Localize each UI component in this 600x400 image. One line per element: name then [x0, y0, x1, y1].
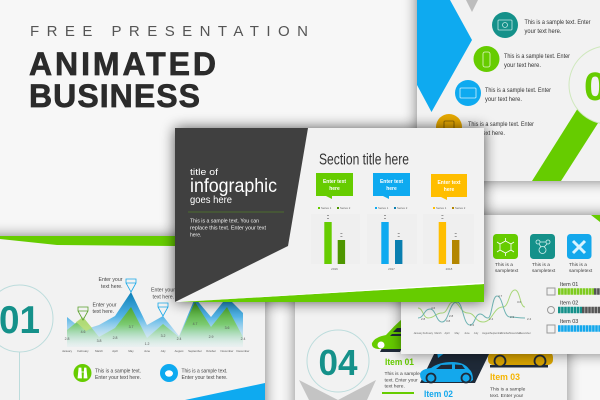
tile captions: sampletext	[569, 268, 593, 274]
tile captions: sampletext	[495, 268, 519, 274]
list item 2: your text here.	[504, 62, 541, 69]
area chart: February	[77, 349, 89, 353]
line chart: 1.2	[470, 323, 475, 327]
number circle	[569, 46, 600, 124]
column: 2018: Series 2	[455, 206, 466, 210]
icon text: green	[74, 364, 141, 382]
icon tile: nodes	[530, 234, 555, 259]
line chart: August	[482, 332, 490, 335]
line chart: March	[435, 332, 442, 335]
icon tile: molecule	[493, 234, 518, 259]
column: 2017: here	[386, 186, 397, 192]
line chart: 2.8	[421, 317, 426, 321]
icon text: green: This is a sample text.	[95, 368, 141, 374]
line chart: October	[501, 332, 510, 335]
column: 2017: Enter text	[380, 179, 403, 185]
dark panel title: title of	[190, 167, 218, 178]
line chart: January	[414, 332, 423, 335]
area chart: 3.8	[97, 339, 101, 343]
icon text: blue: Enter your text here.	[182, 375, 228, 381]
tile captions: sampletext	[532, 268, 556, 274]
column: 2017	[367, 173, 417, 271]
progress: item 02: Item 02	[560, 300, 578, 306]
blue corner	[185, 383, 265, 400]
item 01: text here.	[384, 384, 405, 390]
number circle	[307, 330, 369, 392]
section title: Section title here	[319, 152, 409, 168]
dark panel divider	[188, 211, 284, 213]
area chart: 2.8	[113, 336, 117, 340]
column: 2018: Series 1	[436, 206, 447, 210]
area chart: 2.4	[177, 337, 181, 341]
dark panel	[175, 128, 308, 302]
area chart: 3.2	[161, 334, 165, 338]
tile captions: This is a	[532, 262, 550, 268]
dark panel title: infographic	[190, 176, 277, 197]
line chart: 2.9	[510, 315, 515, 319]
area chart: 3.7	[129, 325, 133, 329]
item 03: text. Enter your	[490, 393, 524, 399]
column: 2016: here	[329, 186, 340, 192]
column: 2018: here	[444, 187, 454, 193]
line chart: November	[509, 332, 521, 335]
line chart: July	[474, 332, 479, 335]
area chart: September	[188, 349, 202, 353]
chart callout texts: Enter your	[151, 288, 175, 294]
pin marker blue	[126, 279, 136, 292]
chart callout texts: text here.	[101, 284, 123, 290]
line chart: 2.4	[489, 317, 494, 321]
panel: bottom slide with cars	[295, 296, 567, 400]
title	[29, 46, 216, 114]
area chart: August	[175, 349, 184, 353]
area chart: March	[95, 349, 103, 353]
area chart	[62, 292, 250, 353]
column: 2016: 2016	[331, 267, 338, 271]
green car	[372, 318, 403, 352]
tile captions: This is a	[495, 262, 513, 268]
line chart: February	[423, 332, 434, 335]
line chart: 4.7	[498, 294, 503, 298]
icon tile: satellite	[567, 234, 592, 259]
icon text: green: Enter your text here.	[95, 375, 141, 381]
area chart: May	[128, 349, 134, 353]
line chart: 2.4	[527, 317, 532, 321]
title: ANIMATED	[29, 46, 216, 82]
grey chevron	[299, 380, 376, 400]
line chart	[414, 290, 532, 335]
panel: top right slide	[417, 0, 600, 181]
column: 2017: Series 2	[397, 206, 408, 210]
list item 3: This is a sample text. Enter	[485, 87, 551, 94]
line chart: May	[455, 332, 460, 335]
tile captions	[495, 262, 593, 274]
tile captions: This is a	[569, 262, 587, 268]
area chart: July	[161, 349, 166, 353]
panel: main slide	[175, 128, 484, 302]
chart callout texts: Enter your	[92, 302, 117, 308]
area chart: November	[221, 349, 234, 353]
area chart: 4.7	[193, 322, 197, 326]
dark panel body text: replace this text. Enter your text	[190, 226, 267, 232]
list item 1: This is a sample text. Enter	[524, 19, 590, 26]
blue car	[420, 352, 490, 383]
line chart: April	[444, 332, 450, 335]
area chart: January	[62, 349, 73, 353]
line chart: 2.8	[449, 314, 454, 318]
column: 2016	[311, 173, 360, 271]
area chart: April	[112, 349, 118, 353]
list item 1: your text here.	[524, 28, 562, 35]
item 03	[490, 372, 526, 399]
green diagonal band	[532, 108, 600, 181]
number circle	[0, 285, 53, 400]
chart callout texts: Enter your	[98, 277, 123, 283]
number circle: 04	[318, 342, 358, 383]
area chart: June	[144, 349, 150, 353]
list item 3: your text here.	[485, 96, 522, 103]
progress: item 01	[547, 282, 600, 295]
chart callout texts	[92, 277, 175, 315]
panel: bottom left slide	[0, 236, 265, 400]
line chart: September	[490, 332, 502, 335]
green bottom band	[180, 284, 484, 302]
item 01: Item 01	[385, 357, 414, 367]
area chart: October	[206, 349, 216, 353]
area chart: 2.8	[65, 337, 69, 341]
progress: item 03: Item 03	[560, 319, 578, 325]
panel: right slide	[401, 215, 600, 354]
column: 2017: 2017	[388, 267, 395, 271]
area chart: 3.6	[225, 326, 229, 330]
number circle: 01	[0, 299, 40, 342]
icon text: blue: This is a sample text.	[182, 368, 228, 374]
list item 4: This is a sample text. Enter	[468, 121, 534, 128]
column: 2016: Series 1	[321, 206, 332, 210]
list item 2: This is a sample text. Enter	[504, 53, 570, 60]
item 01	[382, 357, 420, 394]
list item 4: your text here.	[468, 130, 505, 137]
progress: item 01: Item 01	[560, 282, 578, 288]
line chart: 3.8	[446, 319, 451, 323]
green corner	[591, 215, 600, 222]
green top band	[0, 236, 265, 246]
column: 2018: 2018	[446, 267, 453, 271]
item 02: Item 02	[424, 389, 453, 399]
list item 2	[474, 46, 570, 72]
list item 3	[455, 80, 551, 106]
line chart: 4.6	[431, 306, 436, 310]
pin marker blue 2	[158, 303, 168, 316]
progress: item 03	[547, 319, 600, 333]
progress: item 02	[548, 300, 600, 314]
item 03: This is a sample	[490, 386, 526, 392]
column: 2017: Series 1	[378, 206, 389, 210]
column: 2018	[423, 174, 474, 271]
line chart: December	[519, 332, 531, 335]
item 01: This is a sample	[384, 371, 420, 377]
area chart: 4.6	[81, 330, 85, 334]
pin marker green	[78, 307, 88, 320]
dark panel body text	[190, 218, 267, 238]
heading: free presentation: FREE PRESENTATION	[30, 23, 308, 40]
grey triangle	[466, 0, 478, 12]
list item 1	[492, 12, 590, 38]
list item 4	[436, 114, 534, 140]
line chart: 3.6	[517, 300, 522, 304]
blue arrow shape	[417, 0, 472, 112]
dark panel body text: This is a sample text. You can	[190, 218, 259, 224]
title: BUSINESS	[29, 78, 200, 114]
column: 2016: Enter text	[323, 179, 346, 185]
chart callout texts: text here.	[92, 309, 114, 315]
icon text: blue	[160, 364, 228, 382]
area chart: 2.9	[209, 335, 213, 339]
dark panel body text: here.	[190, 232, 201, 238]
area chart: December	[237, 349, 250, 353]
dark panel title: goes here	[190, 194, 232, 206]
column: 2016: Series 2	[340, 206, 351, 210]
area chart: 1.2	[145, 342, 149, 346]
item 03: Item 03	[490, 372, 520, 382]
line chart: June	[464, 332, 470, 335]
chart callout texts: text here.	[152, 294, 174, 300]
item 01: text. Enter your	[384, 378, 418, 384]
dark panel title	[190, 167, 277, 206]
yellow car	[488, 352, 553, 368]
area chart: 2.4	[241, 337, 245, 341]
column: 2018: Enter text	[437, 180, 461, 186]
